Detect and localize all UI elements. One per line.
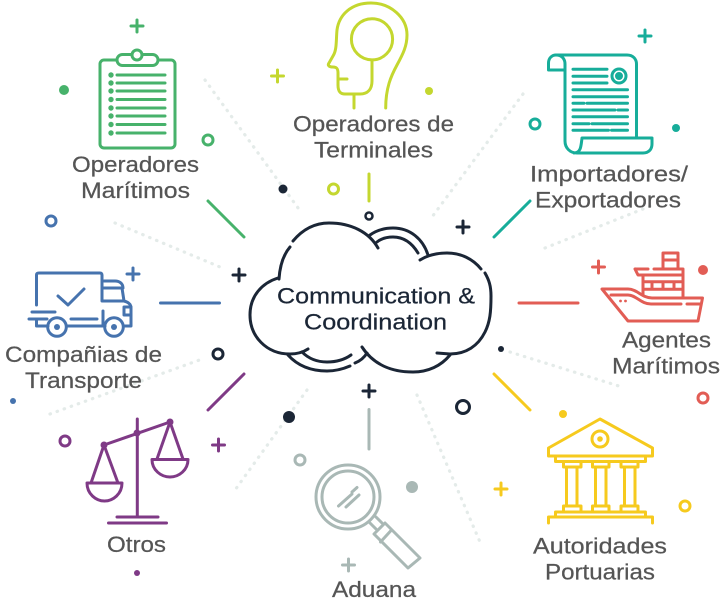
cloud outline <box>250 223 491 372</box>
cloud title: Communication & <box>277 284 475 308</box>
icon: scroll <box>548 55 652 153</box>
label: Importadores/ <box>530 162 689 186</box>
panel: Operadores de Terminales <box>272 3 454 201</box>
label <box>293 112 454 162</box>
label: Aduana <box>332 577 417 602</box>
icon: head <box>328 3 407 108</box>
label <box>72 152 199 203</box>
connector and accents <box>272 70 433 201</box>
connector and accents <box>494 374 690 511</box>
panel: Agentes Marítimos <box>519 253 720 403</box>
label <box>612 328 720 378</box>
connector and accents <box>295 410 418 571</box>
label: Marítimos <box>81 178 190 203</box>
label: Transporte <box>25 368 142 393</box>
label: Terminales <box>314 138 433 162</box>
label: Compañias de <box>5 342 162 367</box>
icon: clipboard <box>100 50 175 148</box>
panel: Aduana <box>295 410 420 602</box>
panel: central cloud <box>250 223 491 372</box>
connector and accents <box>494 30 680 237</box>
icon: scales <box>87 418 188 523</box>
connector and accents <box>59 20 244 237</box>
label: Operadores de <box>293 112 454 136</box>
label: Autoridades <box>533 534 667 558</box>
label: Agentes <box>622 328 711 352</box>
label <box>5 342 162 393</box>
label: Otros <box>107 532 166 557</box>
panel: Autoridades Portuarias <box>494 374 690 584</box>
icon: truck <box>29 273 131 336</box>
dark accents around cloud <box>213 184 504 423</box>
label: Marítimos <box>612 354 720 378</box>
icon: ship <box>602 253 702 321</box>
connector and accents <box>60 374 244 576</box>
label <box>530 162 689 212</box>
panel: Compañias de Transporte <box>5 216 220 404</box>
label: Operadores <box>72 152 199 177</box>
panel: Otros <box>60 374 244 576</box>
cloud title <box>277 284 475 334</box>
icon: magnifier <box>316 465 420 568</box>
connector and accents <box>519 261 708 403</box>
panel: Operadores Marítimos <box>59 20 244 237</box>
panel: Importadores/Exportadores <box>494 30 689 237</box>
cloud title: Coordination <box>304 310 447 334</box>
connector and accents <box>10 216 220 404</box>
label <box>533 534 667 584</box>
dotted radial lines <box>50 80 653 542</box>
icon: building <box>548 419 652 523</box>
label: Portuarias <box>545 560 655 584</box>
label: Exportadores <box>535 188 681 212</box>
